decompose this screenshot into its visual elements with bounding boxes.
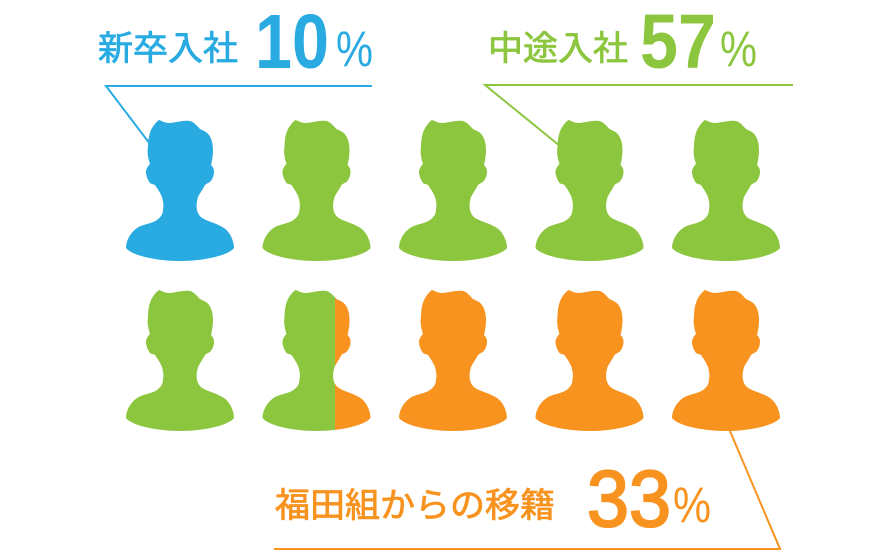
percent sign: % [720, 21, 757, 77]
percent sign: % [673, 477, 711, 533]
people row 1 [126, 120, 780, 261]
person 5: green [672, 120, 780, 261]
person 3: green [399, 120, 507, 261]
person 2: green [262, 120, 370, 261]
person 10: orange [672, 290, 780, 431]
number: 10: 10 [255, 0, 329, 85]
person 1: blue [126, 120, 234, 261]
person 7: split green and orange [262, 290, 370, 431]
callout: transfer from Fukuda-gumi 33% [274, 431, 780, 549]
person 6: green [126, 290, 234, 431]
person 4: green [536, 120, 644, 261]
number: 57: 57 [640, 0, 716, 85]
percent sign: % [336, 21, 373, 77]
leader line: new graduates [106, 86, 372, 144]
label: new graduates: 新卒入社 [98, 30, 238, 68]
callout: new graduates 10% [98, 0, 373, 144]
label: mid-career: 中途入社 [488, 30, 628, 68]
person 9: orange [536, 290, 644, 431]
person 8: orange [399, 290, 507, 431]
label: transfer from Fukuda-gumi: 福田組からの移籍 [275, 487, 555, 525]
leader line: transfer [274, 431, 780, 549]
people row 2 [126, 290, 780, 431]
leader line: mid-career [485, 85, 793, 146]
number: 33: 33 [587, 454, 671, 543]
callout: mid-career 57% [485, 0, 793, 146]
